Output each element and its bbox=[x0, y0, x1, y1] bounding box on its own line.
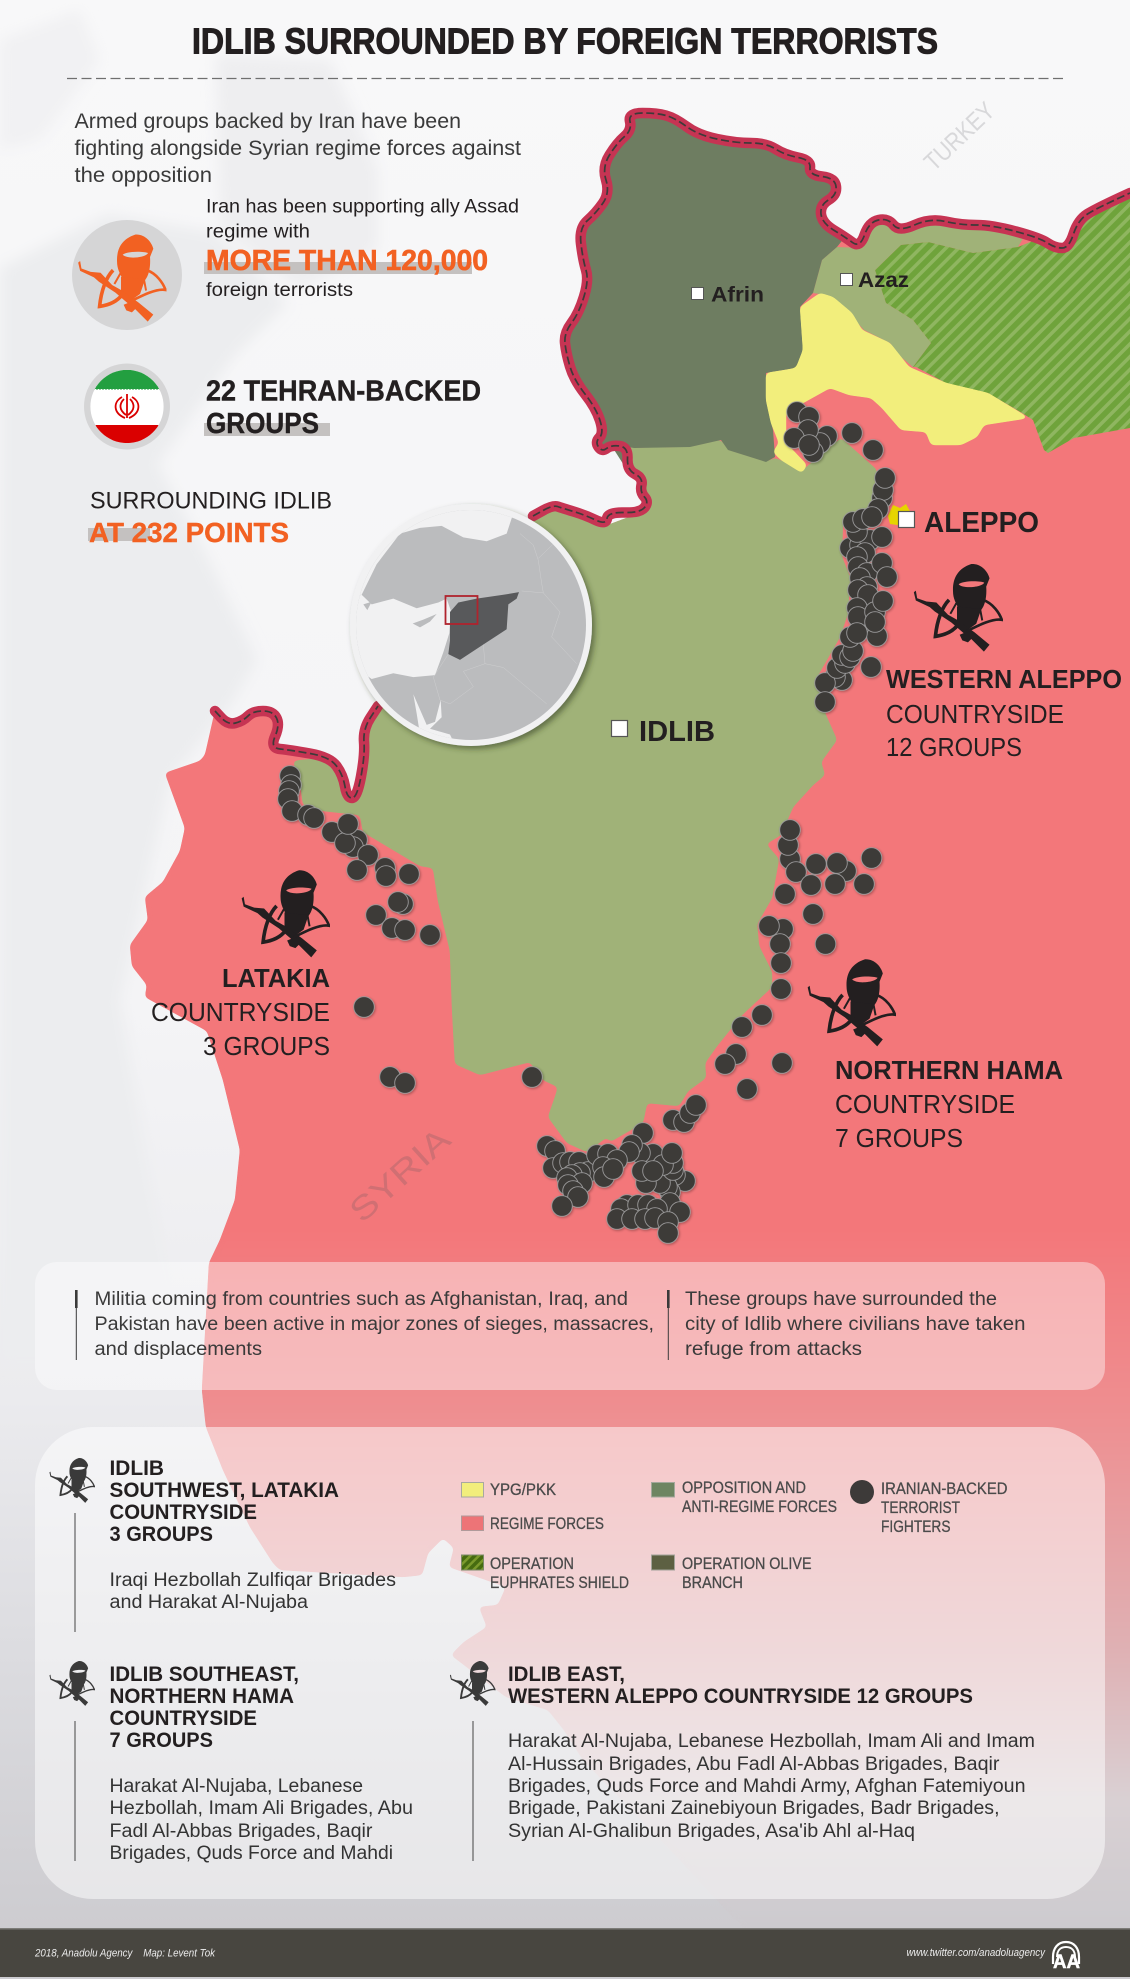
callout: Western Aleppo countryside: COUNTRYSIDE bbox=[886, 699, 1064, 729]
legend: Operation Olive Branch: BRANCH bbox=[682, 1573, 743, 1592]
legend: regime forces: REGIME FORCES bbox=[490, 1514, 604, 1533]
callout: Latakia countryside: LATAKIA bbox=[222, 963, 330, 993]
text block: surrounding Idlib: These groups have surrounded the bbox=[685, 1289, 997, 1310]
Mediterranean Sea bbox=[350, 595, 451, 679]
section: Idlib east: Brigades, Quds Force and Mahdi Army, Afghan Fatemiyoun bbox=[508, 1776, 1026, 1797]
region: opposition Idlib bbox=[293, 438, 877, 1152]
stat: surrounding points bbox=[88, 488, 332, 548]
icon: fighter bbox=[914, 564, 1002, 652]
Iranian-backed fighter dots bbox=[278, 402, 897, 1243]
callout: Western Aleppo countryside: 12 GROUPS bbox=[886, 732, 1022, 762]
legend: opposition bbox=[652, 1478, 837, 1516]
section: Idlib southwest: SOUTHWEST, LATAKIA bbox=[110, 1479, 339, 1502]
callout: Northern Hama countryside: 7 GROUPS bbox=[835, 1123, 963, 1153]
legend: Operation Euphrates Shield bbox=[462, 1554, 629, 1592]
callout: Latakia countryside: COUNTRYSIDE bbox=[151, 997, 330, 1027]
legend: opposition: ANTI-REGIME FORCES bbox=[682, 1497, 837, 1516]
section: Idlib southeast: 7 GROUPS bbox=[110, 1729, 213, 1752]
callout: Western Aleppo countryside bbox=[886, 564, 1122, 762]
legend: Operation Olive Branch bbox=[652, 1554, 812, 1592]
stat: foreign terrorists: regime with bbox=[206, 222, 310, 242]
stat: Tehran-backed groups: GROUPS bbox=[206, 408, 319, 440]
legend: Operation Olive Branch: OPERATION OLIVE bbox=[682, 1554, 812, 1573]
callout: Northern Hama countryside: COUNTRYSIDE bbox=[835, 1089, 1015, 1119]
intro text bbox=[74, 110, 521, 187]
Afrin: Afrin bbox=[711, 284, 764, 306]
legend: Iranian-backed fighters bbox=[850, 1479, 1008, 1536]
twitter address: www.twitter.com/anadoluagency bbox=[906, 1947, 1046, 1959]
Aleppo: ALEPPO bbox=[924, 507, 1039, 539]
stat: surrounding points: AT 232 POINTS bbox=[89, 517, 289, 548]
section: Idlib east: WESTERN ALEPPO COUNTRYSIDE 12 GROUPS bbox=[508, 1685, 973, 1708]
legend: Iranian-backed fighters: TERRORIST bbox=[881, 1498, 960, 1517]
Afrin bbox=[692, 284, 764, 306]
section: Idlib southwest: COUNTRYSIDE bbox=[110, 1501, 257, 1524]
text block: surrounding Idlib bbox=[667, 1289, 1026, 1360]
icon: Iran flag badge bbox=[84, 364, 170, 450]
credits: 2018, Anadolu Agency Map: Levent Tok bbox=[34, 1948, 215, 1960]
legend: Iranian-backed fighters: IRANIAN-BACKED bbox=[881, 1479, 1008, 1498]
section: Idlib east: Al-Hussain Brigades, Abu Fadl Al-Abbas Brigades, Baqir bbox=[508, 1754, 1000, 1775]
legend: YPG/PKK: YPG/PKK bbox=[490, 1480, 557, 1499]
panel: militia summary bbox=[35, 1262, 1105, 1390]
section: Idlib southeast: Fadl Al-Abbas Brigades, Baqir bbox=[110, 1821, 373, 1842]
section: Idlib east bbox=[450, 1661, 1035, 1861]
legend: opposition: OPPOSITION AND bbox=[682, 1478, 806, 1497]
stat: foreign terrorists: foreign terrorists bbox=[206, 280, 353, 301]
Idlib: IDLIB bbox=[639, 716, 715, 748]
Red Sea bbox=[413, 694, 452, 738]
stat: foreign terrorists: Iran has been supporting ally Assad bbox=[206, 196, 519, 218]
section: Idlib east: Harakat Al-Nujaba, Lebanese Hezbollah, Imam Ali and Imam bbox=[508, 1731, 1035, 1752]
callout: Northern Hama countryside bbox=[808, 959, 1063, 1153]
intro text: fighting alongside Syrian regime forces against bbox=[74, 137, 521, 160]
stat: foreign terrorists bbox=[204, 196, 519, 301]
stat: foreign terrorists: MORE THAN 120,000 bbox=[206, 245, 488, 277]
section: Idlib southwest bbox=[49, 1457, 396, 1632]
section: Idlib southwest: 3 GROUPS bbox=[110, 1523, 213, 1546]
region: opposition Azaz bbox=[813, 218, 1025, 367]
logo: Anadolu Agency: AA bbox=[1053, 1952, 1080, 1973]
text block: militia origins: Pakistan have been active in major zones of sieges, massacres, bbox=[94, 1314, 654, 1335]
stat: Tehran-backed groups bbox=[204, 376, 481, 440]
callout: Northern Hama countryside: NORTHERN HAMA bbox=[835, 1055, 1063, 1085]
icon: orange fighter badge bbox=[72, 220, 182, 330]
Turkey label: TURKEY bbox=[919, 97, 1001, 176]
legend: Operation Euphrates Shield: EUPHRATES SHIELD bbox=[490, 1573, 629, 1592]
section: Idlib east: IDLIB EAST, bbox=[508, 1663, 625, 1686]
icon: fighter bbox=[808, 959, 895, 1046]
section: Idlib southeast: Harakat Al-Nujaba, Lebanese bbox=[110, 1776, 363, 1797]
section: Idlib southeast: Hezbollah, Imam Ali Brigades, Abu bbox=[110, 1798, 413, 1819]
footer bbox=[0, 1928, 1130, 1977]
intro text: the opposition bbox=[74, 164, 212, 187]
region: Operation Euphrates Shield bbox=[875, 193, 1130, 453]
section: Idlib southeast: Brigades, Quds Force and Mahdi bbox=[110, 1843, 393, 1864]
section: Idlib southwest: IDLIB bbox=[110, 1457, 164, 1480]
text block: militia origins bbox=[75, 1289, 654, 1360]
region: YPG/PKK bbox=[766, 293, 1029, 473]
callout: Western Aleppo countryside: WESTERN ALEPPO bbox=[886, 664, 1122, 694]
legend: regime forces bbox=[462, 1514, 604, 1533]
legend: YPG/PKK bbox=[462, 1480, 557, 1499]
callout: Latakia countryside bbox=[151, 870, 330, 1061]
section: Idlib southeast: COUNTRYSIDE bbox=[110, 1707, 257, 1730]
text block: militia origins: and displacements bbox=[94, 1339, 262, 1360]
text block: surrounding Idlib: city of Idlib where civilians have taken bbox=[685, 1314, 1026, 1335]
stat: surrounding points: SURROUNDING IDLIB bbox=[90, 488, 332, 514]
border lines bbox=[433, 534, 577, 704]
text block: militia origins: Militia coming from countries such as Afghanistan, Iraq, and bbox=[94, 1289, 628, 1310]
Idlib locator rectangle bbox=[446, 596, 478, 624]
section: Idlib southeast: IDLIB SOUTHEAST, bbox=[110, 1663, 299, 1686]
Aegean island bbox=[364, 602, 371, 610]
section: Idlib southwest: and Harakat Al-Nujaba bbox=[110, 1592, 308, 1613]
title: IDLIB SURROUNDED BY FOREIGN TERRORISTS bbox=[192, 20, 938, 62]
Azaz: Azaz bbox=[858, 269, 909, 292]
section: Idlib southwest: Iraqi Hezbollah Zulfiqar Brigades bbox=[110, 1570, 396, 1591]
icon: fighter bbox=[242, 870, 329, 957]
Azaz bbox=[840, 269, 909, 292]
legend: Operation Euphrates Shield: OPERATION bbox=[490, 1554, 574, 1573]
logo: Anadolu Agency bbox=[1053, 1942, 1080, 1973]
Black Sea and northern edge bbox=[360, 510, 512, 596]
region: Operation Olive Branch bbox=[564, 113, 845, 470]
section: Idlib east: Brigade, Pakistani Zainebiyoun Brigades, Badr Brigades, bbox=[508, 1798, 1000, 1819]
callout: Latakia countryside: 3 GROUPS bbox=[203, 1031, 330, 1061]
section: Idlib east: Syrian Al-Ghalibun Brigades, Asa'ib Ahl al-Haq bbox=[508, 1821, 915, 1842]
legend bbox=[462, 1478, 1008, 1592]
region: Aleppo yellow patch bbox=[888, 504, 912, 526]
inset locator globe bbox=[350, 503, 592, 756]
text block: surrounding Idlib: refuge from attacks bbox=[685, 1339, 862, 1360]
Cyprus bbox=[413, 614, 437, 627]
intro text: Armed groups backed by Iran have been bbox=[74, 110, 461, 133]
city markers and labels bbox=[612, 269, 1039, 748]
legend: Iranian-backed fighters: FIGHTERS bbox=[881, 1517, 950, 1536]
Turkey border bbox=[215, 113, 1130, 798]
stat: Tehran-backed groups: 22 TEHRAN-BACKED bbox=[206, 376, 481, 408]
section: Idlib southeast: NORTHERN HAMA bbox=[110, 1685, 294, 1708]
Syria label: SYRIA bbox=[342, 1120, 457, 1229]
section: Idlib southeast bbox=[49, 1661, 413, 1864]
Syria bbox=[448, 592, 519, 660]
panel: group lists and legend bbox=[35, 1427, 1105, 1899]
